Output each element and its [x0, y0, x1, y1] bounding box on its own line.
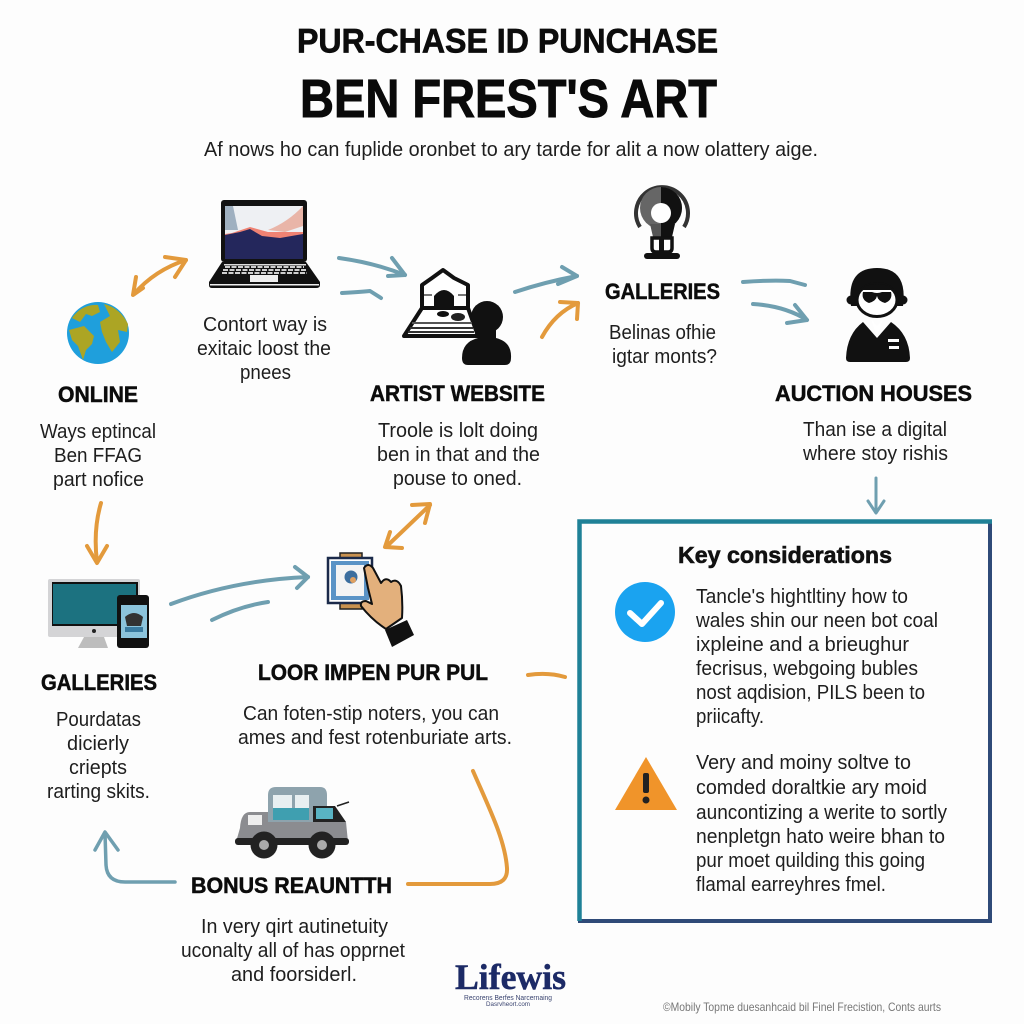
arrow: hand to artist website	[385, 504, 430, 548]
icon: blue check	[615, 582, 675, 642]
title	[297, 22, 718, 129]
text block: loor impen pur pul: ames and fest rotenburiate arts.	[238, 727, 512, 749]
text block: galleries left: criepts	[69, 757, 127, 779]
text block: artist website: Troole is lolt doing	[378, 420, 538, 442]
logo: Recorens Berfes Narcernaing	[464, 995, 552, 1002]
icon: warning triangle	[615, 757, 677, 810]
text block: second consideration: Very and moiny soltve to	[696, 752, 911, 774]
arrow: online to devices	[87, 503, 107, 563]
text block: first consideration: fecrisus, webgoing bubles	[696, 658, 918, 680]
text block: online: Ways eptincal	[40, 421, 156, 443]
text block: bonus reauntth: BONUS REAUNTTH	[191, 873, 392, 898]
text block: galleries top: igtar monts?	[612, 346, 717, 368]
icon: auction person	[846, 268, 910, 362]
text block: loor impen pur pul	[238, 660, 512, 749]
text block: auction houses: where stoy rishis	[802, 443, 948, 465]
panel heading: Key considerations	[678, 542, 892, 568]
icon: globe	[67, 302, 129, 364]
text block: online: Ben FFAG	[54, 445, 142, 467]
arrows: galleries to auction houses	[743, 281, 807, 323]
text block: artist website: ben in that and the	[377, 444, 540, 466]
arrow: bonus to galleries	[95, 832, 175, 882]
text block: galleries top	[605, 279, 720, 368]
icon: monitor and phone	[48, 579, 149, 648]
text block: second consideration: flamal earreyhres fmel.	[696, 874, 886, 896]
icon: truck	[235, 787, 349, 858]
arrows: laptop to artist website	[339, 258, 405, 298]
text block: artist website	[370, 381, 545, 490]
title: PUR-CHASE ID PUNCHASE	[297, 22, 718, 60]
text block: auction houses: AUCTION HOUSES	[775, 381, 972, 406]
text block: second consideration: auncontizing a werite to sortly	[696, 802, 947, 824]
text block: auction houses: Than ise a digital	[803, 419, 947, 441]
footer credit: ©Mobily Topme duesanhcaid bil Finel Frecistion, Conts aurts	[663, 1000, 941, 1014]
text block: loor impen pur pul: LOOR IMPEN PUR PUL	[258, 660, 488, 685]
icon: hand on tablet	[328, 553, 414, 647]
text block: galleries left: dicierly	[67, 733, 129, 755]
text block: bonus reauntth: In very qirt autinetuity	[201, 916, 388, 938]
title: BEN FREST'S ART	[300, 69, 717, 129]
text block: second consideration	[696, 752, 947, 896]
arrow: auction houses to key considerations	[868, 478, 884, 513]
text block: first consideration: nost aqdision, PILS been to	[696, 682, 925, 704]
arrow: artist website to galleries (blue)	[515, 267, 577, 292]
logo: Lifewis	[455, 957, 566, 997]
text block: bonus reauntth: and foorsiderl.	[231, 964, 357, 986]
arrow: artist website to galleries (orange)	[542, 302, 578, 337]
text block: second consideration: nenpletgn hato weire bhan to	[696, 826, 945, 848]
text block: galleries left: rarting skits.	[47, 781, 150, 803]
icon: laptop	[209, 200, 320, 288]
text block: online: part nofice	[53, 469, 144, 491]
text block: first consideration	[695, 586, 938, 728]
text block: online: ONLINE	[58, 382, 138, 407]
text block: galleries top: Belinas ofhie	[609, 322, 716, 344]
text block: laptop: Contort way is	[203, 314, 327, 336]
text block: first consideration: Tancle's hightltiny how to	[696, 586, 908, 608]
icon: microphone	[636, 187, 688, 259]
arrow: online to laptop	[133, 257, 186, 295]
arrows: devices to hand	[171, 567, 308, 620]
text block: loor impen pur pul: Can foten-stip noters, you can	[243, 703, 499, 725]
text block: bonus reauntth: uconalty all of has opprnet	[181, 940, 405, 962]
panel: key considerations	[578, 520, 992, 921]
arrow: loor impen to bonus	[408, 771, 507, 884]
text block: galleries top: GALLERIES	[605, 279, 720, 304]
text block: second consideration: comded doraltkie ary moid	[696, 777, 927, 799]
text block: first consideration: ixpleine and a brieughur	[696, 634, 909, 656]
text block: galleries left: Pourdatas	[56, 709, 141, 731]
text block: laptop: exitaic loost the	[197, 338, 331, 360]
text block: artist website: ARTIST WEBSITE	[370, 381, 545, 406]
text block: galleries left	[41, 670, 157, 803]
connector: to key considerations	[528, 674, 565, 677]
text block: auction houses	[775, 381, 972, 465]
text block: first consideration: wales shin our neen bot coal	[695, 610, 938, 632]
text block: galleries left: GALLERIES	[41, 670, 157, 695]
text block: online	[40, 382, 156, 491]
text block: first consideration: priicafty.	[696, 706, 764, 728]
text block: artist website: pouse to oned.	[393, 468, 522, 490]
logo: Dasrvheort.com	[486, 1002, 530, 1008]
text block: laptop: pnees	[240, 362, 291, 384]
subtitle: Af nows ho can fuplide oronbet to ary tarde for alit a now olattery aige.	[204, 138, 818, 161]
text block: bonus reauntth	[181, 873, 405, 986]
icon: artist website	[404, 270, 511, 365]
text block: laptop	[197, 314, 331, 384]
text block: second consideration: pur moet quilding this going	[696, 850, 925, 872]
